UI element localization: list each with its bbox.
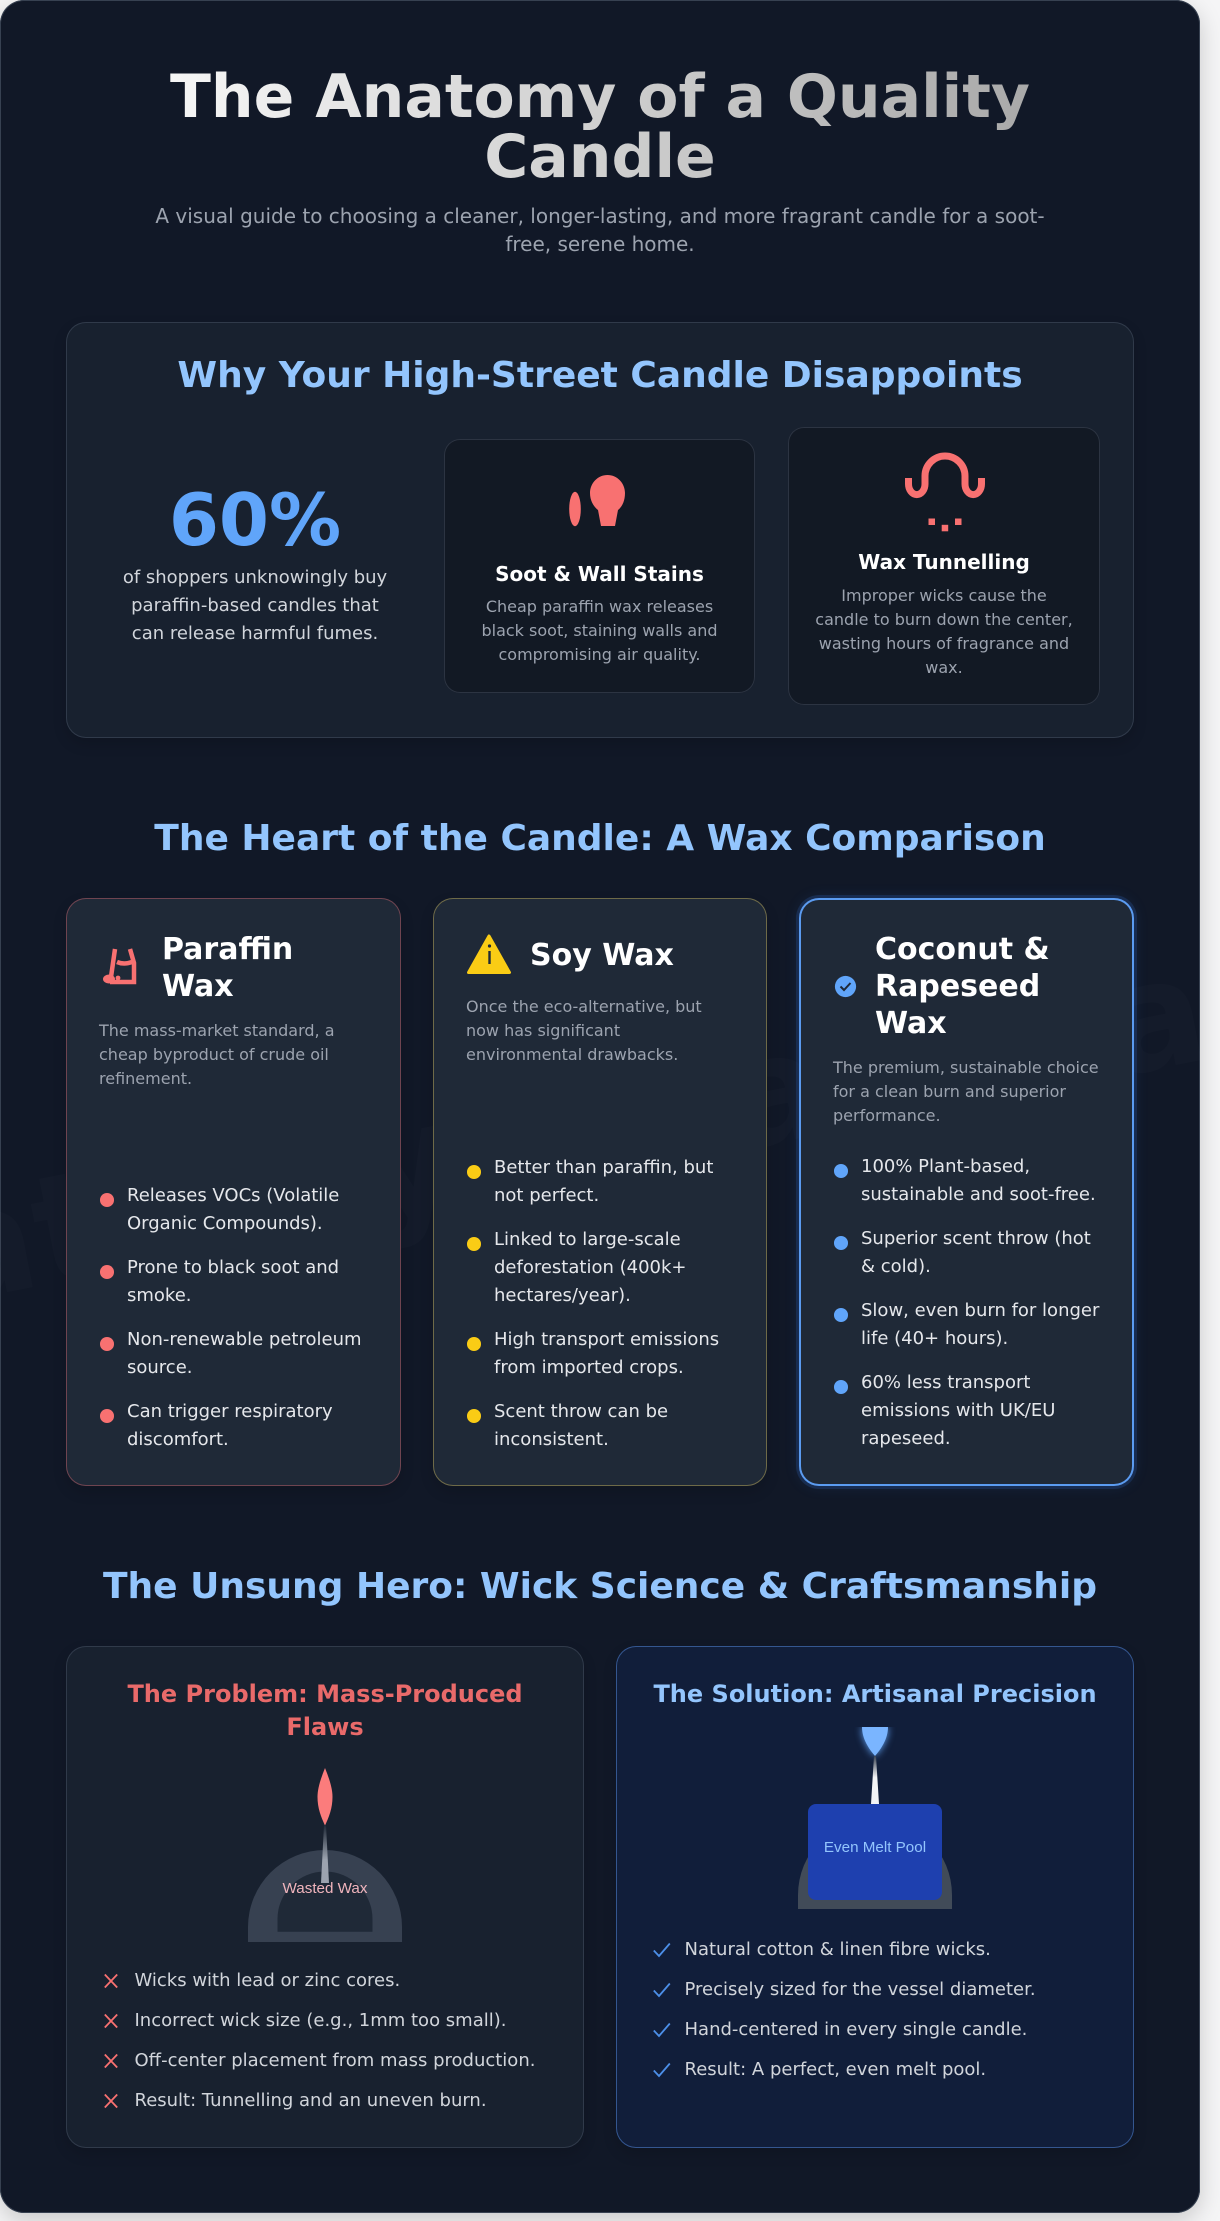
bullet: scent throw: Scent throw can be bbox=[494, 1401, 668, 1422]
panel: soy wax bbox=[433, 898, 767, 1486]
bullet: respiratory: Can trigger respiratory bbox=[127, 1401, 333, 1422]
panel title: Flaws bbox=[286, 1713, 364, 1741]
diagram: even melt pool candle bbox=[798, 1727, 952, 1909]
item: melt pool result bbox=[616, 2056, 1134, 2084]
card description: Cheap paraffin wax releases bbox=[486, 597, 713, 616]
heading: why your high-street candle disappoints: Why Your High-Street Candle Disappoints bbox=[177, 355, 1023, 396]
item: natural fibre: Natural cotton & linen fibre wicks. bbox=[684, 1939, 991, 1960]
panel title: The Problem: Mass-Produced bbox=[127, 1680, 523, 1708]
title: Candle bbox=[484, 122, 716, 192]
bullet: deforestation bbox=[467, 1229, 686, 1306]
bullet: slow burn bbox=[834, 1300, 1100, 1349]
card description: wasting hours of fragrance and bbox=[819, 634, 1069, 653]
card: wax tunnelling bbox=[788, 427, 1100, 705]
stat number: 60% bbox=[169, 478, 341, 562]
description: The mass-market standard, a bbox=[99, 1021, 334, 1040]
bullet: scent throw: Superior scent throw (hot bbox=[861, 1228, 1091, 1249]
bullet list bbox=[100, 1185, 362, 1450]
icon: warning triangle bbox=[467, 934, 512, 974]
item: tunnelling result: Result: Tunnelling and an uneven burn. bbox=[134, 2090, 487, 2111]
diagram: tunnelled candle: Wasted Wax bbox=[283, 1880, 368, 1897]
title bbox=[162, 932, 293, 1004]
bullet: better than paraffin: not perfect. bbox=[494, 1185, 599, 1206]
bullet: transport: High transport emissions bbox=[494, 1329, 719, 1350]
item: precise size: Precisely sized for the vessel diameter. bbox=[684, 1979, 1036, 2000]
bullet: plant-based: sustainable and soot-free. bbox=[861, 1184, 1096, 1205]
item: off-center: Off-center placement from mass production. bbox=[134, 2050, 535, 2071]
description: environmental drawbacks. bbox=[466, 1045, 678, 1064]
bullet: plant-based bbox=[834, 1156, 1096, 1205]
heading: wax comparison: The Heart of the Candle: A Wax Comparison bbox=[154, 818, 1046, 859]
bullet: scent throw: & cold). bbox=[861, 1256, 931, 1277]
bullet list bbox=[467, 1157, 719, 1450]
bullet: scent throw bbox=[467, 1401, 668, 1450]
description: Once the eco-alternative, but bbox=[466, 997, 702, 1016]
diagram: tunnelled candle bbox=[248, 1768, 402, 1942]
bullet: respiratory bbox=[100, 1401, 333, 1450]
title: Soy Wax bbox=[530, 938, 674, 973]
bullet: transport bbox=[834, 1372, 1055, 1449]
bullet: deforestation: hectares/year). bbox=[494, 1285, 631, 1306]
stat description: paraffin-based candles that bbox=[131, 595, 379, 616]
panel: paraffin wax bbox=[66, 898, 401, 1486]
title bbox=[875, 932, 1050, 1041]
bullet: soot bbox=[100, 1257, 339, 1306]
description: performance. bbox=[833, 1106, 941, 1125]
bullet: plant-based: 100% Plant-based, bbox=[861, 1156, 1030, 1177]
list: problems bbox=[104, 1970, 535, 2111]
item: lead or zinc: Wicks with lead or zinc cores. bbox=[134, 1970, 400, 1991]
bullet: non-renewable: Non-renewable petroleum bbox=[127, 1329, 362, 1350]
card title: Wax Tunnelling bbox=[858, 550, 1030, 574]
bullet: transport bbox=[467, 1329, 719, 1378]
bullet: deforestation: Linked to large-scale bbox=[494, 1229, 681, 1250]
card description bbox=[481, 597, 718, 664]
card description: compromising air quality. bbox=[498, 645, 700, 664]
title: The Anatomy of a Quality bbox=[170, 62, 1030, 132]
icon: paraffin bbox=[103, 948, 136, 984]
panel title: The Solution: Artisanal Precision bbox=[653, 1680, 1097, 1708]
panel: why high-street candles disappoint bbox=[66, 322, 1134, 738]
description: refinement. bbox=[99, 1069, 192, 1088]
title bbox=[66, 67, 1134, 187]
bullet: slow burn: life (40+ hours). bbox=[861, 1328, 1008, 1349]
card title: Soot & Wall Stains bbox=[495, 562, 704, 586]
bullet: non-renewable bbox=[100, 1329, 362, 1378]
bullet: scent throw bbox=[834, 1228, 1091, 1277]
subtitle: free, serene home. bbox=[505, 232, 695, 256]
stat description bbox=[123, 567, 387, 644]
bullet: better than paraffin: Better than paraffin, but bbox=[494, 1157, 713, 1178]
heading: wick science: The Unsung Hero: Wick Science & Craftsmanship bbox=[103, 1566, 1097, 1607]
bullet: VOCs bbox=[100, 1185, 339, 1234]
card description: Improper wicks cause the bbox=[841, 586, 1047, 605]
card: soot and wall stains bbox=[444, 439, 755, 693]
stat: 60 percent of shoppers bbox=[123, 478, 387, 644]
description bbox=[98, 1021, 334, 1088]
bullet: deforestation: deforestation (400k+ bbox=[494, 1257, 686, 1278]
title: Wax bbox=[875, 1006, 947, 1041]
bullet: soot: Prone to black soot and bbox=[127, 1257, 339, 1278]
icon: tunnelling bbox=[905, 452, 985, 532]
description: cheap byproduct of crude oil bbox=[99, 1045, 329, 1064]
item: incorrect size: Incorrect wick size (e.g., 1mm too small). bbox=[134, 2010, 506, 2031]
panel: the problem bbox=[66, 1646, 584, 2148]
item: melt pool result: Result: A perfect, even melt pool. bbox=[684, 2059, 986, 2080]
description: for a clean burn and superior bbox=[833, 1082, 1066, 1101]
stat description: of shoppers unknowingly buy bbox=[123, 567, 387, 588]
panel: coconut and rapeseed wax bbox=[799, 898, 1134, 1486]
bullet: VOCs: Releases VOCs (Volatile bbox=[127, 1185, 339, 1206]
description bbox=[466, 997, 702, 1064]
description: The premium, sustainable choice bbox=[833, 1058, 1099, 1077]
description: now has significant bbox=[466, 1021, 620, 1040]
icon: check badge bbox=[834, 976, 856, 998]
bullet: non-renewable: source. bbox=[127, 1357, 192, 1378]
title: Wax bbox=[162, 969, 234, 1004]
card description: black soot, staining walls and bbox=[481, 621, 718, 640]
title: Coconut & bbox=[875, 932, 1050, 967]
card description: wax. bbox=[925, 658, 963, 677]
title: Paraffin bbox=[162, 932, 293, 967]
stat description: can release harmful fumes. bbox=[132, 623, 378, 644]
subtitle bbox=[155, 204, 1045, 256]
bullet: slow burn: Slow, even burn for longer bbox=[861, 1300, 1099, 1321]
bullet: scent throw: inconsistent. bbox=[494, 1429, 609, 1450]
title: Rapeseed bbox=[875, 969, 1040, 1004]
bullet: transport: 60% less transport bbox=[861, 1372, 1030, 1393]
item: hand-centered bbox=[616, 2016, 1134, 2044]
bullet: transport: emissions with UK/EU bbox=[861, 1400, 1055, 1421]
item: hand-centered: Hand-centered in every single candle. bbox=[684, 2019, 1027, 2040]
card description: candle to burn down the center, bbox=[815, 610, 1073, 629]
panel title bbox=[127, 1680, 523, 1741]
description bbox=[832, 1058, 1099, 1125]
bullet: soot: smoke. bbox=[127, 1285, 192, 1306]
item: precise size bbox=[616, 1976, 1134, 2004]
diagram: even melt pool candle: Even Melt Pool bbox=[824, 1839, 926, 1856]
bullet: VOCs: Organic Compounds). bbox=[127, 1213, 323, 1234]
bullet: transport: rapeseed. bbox=[861, 1428, 951, 1449]
bullet: respiratory: discomfort. bbox=[127, 1429, 229, 1450]
bullet list bbox=[834, 1156, 1100, 1449]
icon: soot bbox=[569, 475, 625, 526]
card description bbox=[815, 586, 1073, 677]
list: solutions bbox=[653, 1939, 1036, 2080]
bullet: transport: from imported crops. bbox=[494, 1357, 684, 1378]
subtitle: A visual guide to choosing a cleaner, longer-lasting, and more fragrant candle for a soot- bbox=[155, 204, 1045, 228]
panel: the solution bbox=[616, 1646, 1134, 2148]
bullet: better than paraffin bbox=[467, 1157, 713, 1206]
